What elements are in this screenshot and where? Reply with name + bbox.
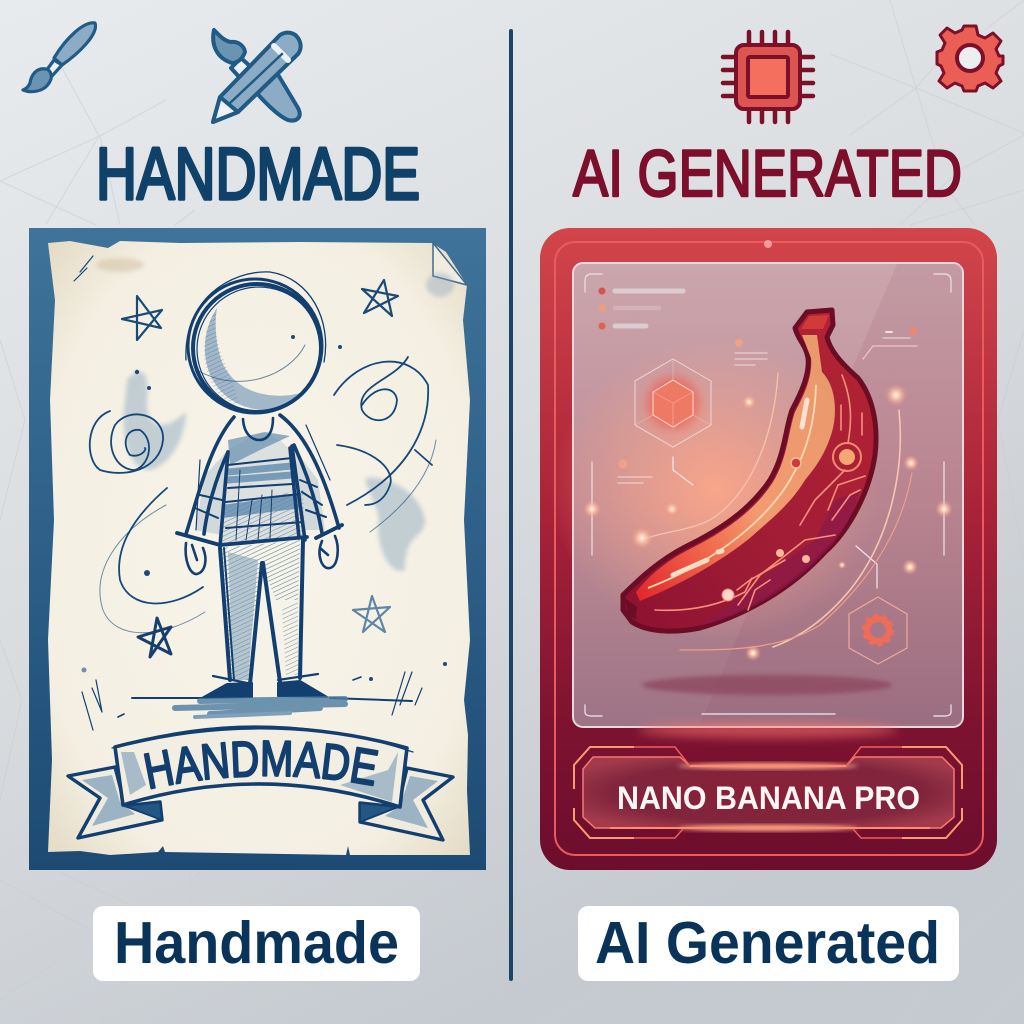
nameplate text: NANO BANANA PRO bbox=[617, 780, 920, 816]
motion arcs bbox=[647, 373, 912, 650]
ribbon center bbox=[115, 728, 407, 807]
banana highlights bbox=[673, 400, 807, 575]
ground scribble bbox=[82, 672, 422, 730]
panel: handmade sketch bbox=[29, 228, 486, 870]
icon: microchip bbox=[723, 32, 813, 122]
screen list bbox=[598, 288, 683, 330]
caption: Handmade: Handmade bbox=[114, 910, 399, 976]
caption: AI Generated: AI Generated bbox=[595, 910, 940, 976]
circuit nodes bbox=[833, 443, 861, 471]
banana magenta underside bbox=[700, 490, 860, 626]
floating shadow bbox=[642, 675, 892, 695]
shirt stripes bbox=[226, 466, 298, 514]
torso and arms bbox=[186, 415, 339, 546]
head shading bbox=[205, 308, 305, 410]
circuit traces bbox=[655, 375, 865, 610]
screen corner brackets bbox=[585, 274, 951, 716]
brush ferrule and head bbox=[231, 58, 252, 79]
icon: gear bbox=[937, 26, 1003, 91]
banana lit side bbox=[636, 335, 835, 601]
stars bbox=[122, 280, 398, 657]
banner text: HANDMADE bbox=[144, 740, 378, 790]
legs bbox=[220, 540, 303, 684]
paper stains and washes bbox=[124, 372, 425, 571]
heading: HANDMADE: HANDMADE bbox=[96, 134, 420, 215]
gear hexagon bbox=[849, 597, 907, 664]
banana skin bbox=[623, 310, 876, 631]
hexagon cube bbox=[635, 359, 711, 447]
dots bbox=[82, 335, 447, 681]
banana tip bbox=[801, 315, 829, 329]
pencil bbox=[213, 33, 301, 122]
ribbon left tail bbox=[68, 767, 162, 838]
shoes bbox=[202, 683, 252, 698]
banner ribbon bbox=[68, 726, 453, 840]
scribble swirls bbox=[74, 256, 436, 633]
callout marks bbox=[618, 332, 917, 588]
head bbox=[186, 272, 326, 413]
body shading bbox=[222, 432, 305, 545]
brush handle bbox=[250, 68, 300, 120]
hands bbox=[186, 543, 205, 574]
red banana bbox=[623, 310, 876, 631]
card body bbox=[540, 228, 997, 870]
navy frame bbox=[29, 228, 486, 870]
paper fold corner bbox=[433, 243, 467, 285]
ribbon right tail bbox=[360, 768, 453, 840]
center divider bbox=[509, 29, 513, 981]
nameplate bbox=[574, 722, 962, 838]
glowing nodes bbox=[583, 384, 953, 661]
torn paper bbox=[48, 241, 470, 855]
panel: AI generated card bbox=[540, 228, 997, 870]
stick figure sketch bbox=[177, 272, 342, 698]
glass screen bbox=[573, 263, 963, 727]
collar bbox=[243, 418, 273, 440]
icon: paintbrush bbox=[23, 23, 95, 92]
icon: crossed brush and pencil bbox=[213, 30, 301, 122]
